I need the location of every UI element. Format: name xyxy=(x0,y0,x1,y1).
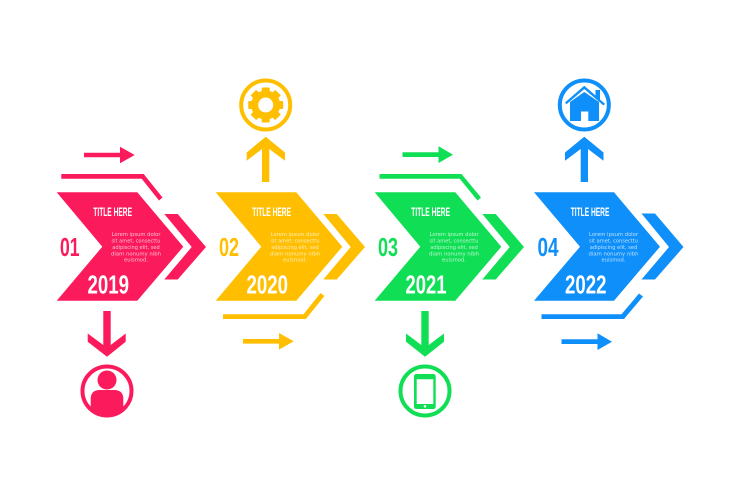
year: 2021 xyxy=(406,270,446,300)
body text xyxy=(429,232,479,264)
year: 2022 xyxy=(565,270,606,300)
bent line xyxy=(542,294,643,319)
body text: euismod. xyxy=(602,258,626,264)
chevron xyxy=(57,192,183,301)
icon: house xyxy=(560,80,609,130)
icon: gear xyxy=(241,80,290,130)
body text: sit amet, consecttu xyxy=(589,238,638,244)
icon: tablet xyxy=(400,366,450,416)
year: 2020 xyxy=(246,270,288,300)
panel: step 1 2019 xyxy=(57,147,206,420)
body text xyxy=(588,232,639,264)
title: TITLE HERE xyxy=(571,207,610,219)
chevron xyxy=(216,192,342,301)
body text: euismod. xyxy=(442,258,466,264)
body text: adipiscing elit, sed xyxy=(112,245,160,251)
number: 03 xyxy=(378,234,398,262)
body text: Lorem ipsum dolor xyxy=(270,232,320,238)
bent line xyxy=(61,174,162,200)
body text: sit amet, consecttu xyxy=(430,238,478,244)
body text: diam nonumy nibh xyxy=(111,251,161,257)
small arrow xyxy=(84,147,135,163)
small arrow xyxy=(402,146,453,163)
small arrow xyxy=(562,333,612,350)
panel: step 4 2022 xyxy=(534,80,684,350)
icon: person xyxy=(82,366,132,420)
body text: Lorem ipsum dolor xyxy=(589,232,639,238)
down arrow xyxy=(406,311,444,357)
chevron xyxy=(534,192,660,301)
body text xyxy=(270,232,320,264)
chevron xyxy=(375,192,501,301)
body text: euismod. xyxy=(283,258,307,264)
body text: sit amet, consecttu xyxy=(270,238,320,244)
body text: diam nonumy nibh xyxy=(270,251,320,257)
body text: diam nonumy nibh xyxy=(588,251,638,257)
body text: sit amet, consecttu xyxy=(112,238,160,244)
body text: euismod. xyxy=(124,258,148,264)
body text: Lorem ipsum dolor xyxy=(112,232,161,238)
body text: adipiscing elit, sed xyxy=(590,245,637,251)
title: TITLE HERE xyxy=(93,207,132,219)
small chevron xyxy=(323,214,365,280)
bent line xyxy=(223,293,324,319)
body text: diam nonumy nibh xyxy=(429,251,479,257)
number: 01 xyxy=(60,234,80,262)
small chevron xyxy=(642,214,684,280)
title: TITLE HERE xyxy=(411,207,450,219)
bent line xyxy=(380,174,481,200)
year: 2019 xyxy=(88,270,129,300)
body text: adipiscing elit, sed xyxy=(271,245,319,251)
down arrow xyxy=(88,311,126,357)
small chevron xyxy=(164,214,206,280)
up arrow xyxy=(565,137,604,182)
small chevron xyxy=(482,214,524,280)
body text: Lorem ipsum dolor xyxy=(430,232,479,238)
number: 02 xyxy=(219,234,239,262)
title: TITLE HERE xyxy=(252,207,291,219)
tablet button xyxy=(424,405,426,408)
number: 04 xyxy=(538,234,559,262)
panel: step 2 2020 xyxy=(216,80,365,350)
up arrow xyxy=(247,137,285,182)
panel: step 3 2021 xyxy=(375,146,524,416)
body text xyxy=(111,232,161,264)
body text: adipiscing elit, sed xyxy=(430,245,478,251)
small arrow xyxy=(243,333,294,350)
